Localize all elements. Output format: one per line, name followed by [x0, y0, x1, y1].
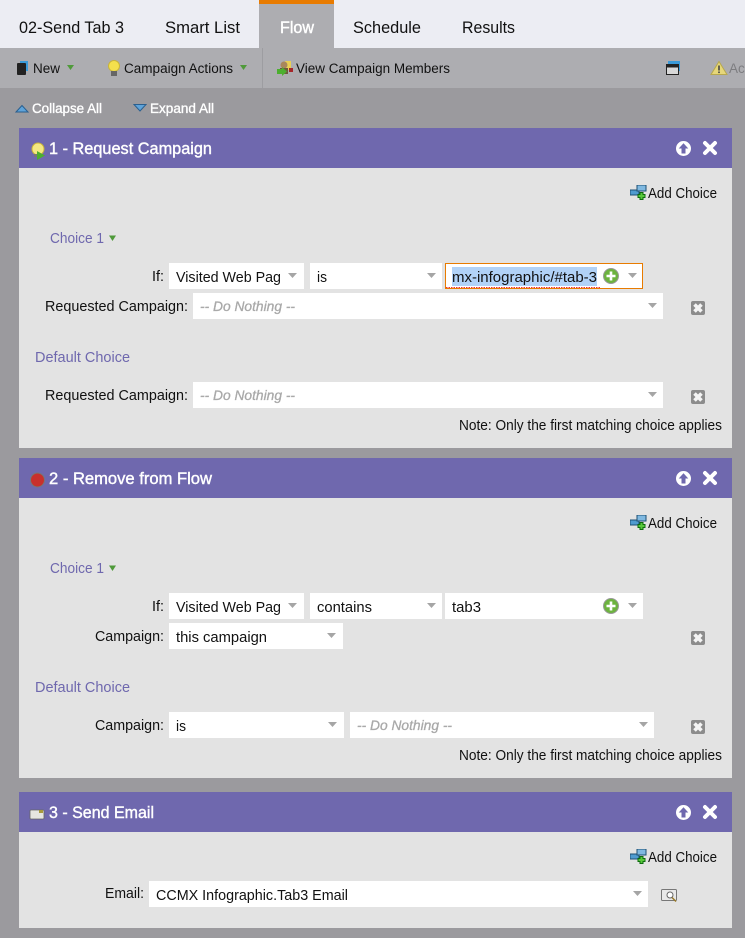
icon: window [666, 61, 680, 74]
default Campaign row [95, 712, 705, 738]
note: Note: Only the first matching choice applies [459, 418, 722, 434]
Requested Campaign row: Requested Campaign: [45, 299, 188, 315]
Campaign row: Campaign: [95, 629, 164, 645]
default Requested Campaign row: Requested Campaign: [45, 388, 188, 404]
default Campaign row: is [176, 719, 186, 735]
Email row: CCMX Infographic.Tab3 Email [156, 888, 348, 904]
header: 2 - Remove from Flow [49, 470, 212, 488]
If row: If: [152, 269, 164, 285]
tab: Schedule: Schedule [353, 19, 421, 37]
add choice: Add Choice [648, 186, 717, 202]
If row [152, 593, 643, 619]
Default Choice heading: Default Choice [35, 680, 130, 696]
icon: warning [711, 62, 727, 74]
Campaign row: this campaign [176, 630, 267, 646]
tab: Flow active [259, 0, 334, 48]
Expand All: Expand All [150, 101, 214, 116]
default Requested Campaign row [45, 382, 705, 408]
tab bar [0, 0, 745, 48]
panel: 2 Remove from Flow [19, 458, 732, 778]
If row: is [317, 270, 327, 286]
panel: 3 Send Email [19, 792, 732, 928]
Choice 1 heading: Choice 1 [50, 561, 104, 577]
icon: red stop [30, 473, 44, 487]
Campaign row [95, 623, 705, 649]
Email row: Email: [105, 886, 144, 902]
If row: Visited Web Pag [176, 600, 281, 616]
If row: If: [152, 599, 164, 615]
If row [152, 263, 642, 289]
If row: tab3 [452, 600, 481, 616]
icon: light bulb [108, 60, 120, 76]
Requested Campaign row: -- Do Nothing -- [200, 298, 295, 314]
Default Choice heading: Default Choice [35, 350, 130, 366]
icon: bulb with play [32, 143, 45, 160]
default Requested Campaign row: -- Do Nothing -- [200, 387, 295, 403]
header [19, 458, 732, 498]
icon: green dropdown arrow [240, 65, 247, 70]
Email row [105, 881, 676, 907]
collapse and expand controls [16, 101, 214, 116]
icon: new book [17, 61, 28, 75]
If row: contains [317, 600, 372, 616]
header: 3 - Send Email [49, 804, 154, 822]
View Campaign Members: View Campaign Members [296, 61, 450, 76]
Choice 1 heading: Choice 1 [50, 231, 104, 247]
add choice: Add Choice [648, 516, 717, 532]
tab: Smart List: Smart List [165, 19, 240, 37]
default Campaign row: Campaign: [95, 718, 164, 734]
default Campaign row: -- Do Nothing -- [357, 717, 452, 733]
icon: envelope [30, 810, 44, 819]
selected url field [446, 264, 642, 288]
If row: Visited Web Pag [176, 270, 281, 286]
Requested Campaign row [45, 293, 705, 319]
header [19, 128, 732, 168]
tab: Results: Results [462, 19, 515, 37]
selected url field: mx-infographic/#tab-3 [452, 270, 597, 286]
toolbar [0, 48, 745, 88]
icon: search [662, 890, 676, 902]
icon: campaign members [277, 61, 293, 76]
panel: 1 Request Campaign [19, 128, 732, 448]
icon: expand [134, 104, 146, 111]
add choice: Add Choice [648, 850, 717, 866]
Collapse All: Collapse All [32, 101, 102, 116]
note: Note: Only the first matching choice applies [459, 748, 722, 764]
icon: green dropdown arrow [67, 65, 74, 70]
Campaign Actions menu: Campaign Actions [124, 61, 233, 76]
tab: Flow active: Flow [280, 19, 314, 37]
New menu: New [33, 61, 60, 76]
tab: 02-Send Tab 3: 02-Send Tab 3 [19, 19, 124, 37]
header [19, 792, 732, 832]
icon: collapse [16, 106, 28, 112]
header: 1 - Request Campaign [49, 140, 212, 158]
